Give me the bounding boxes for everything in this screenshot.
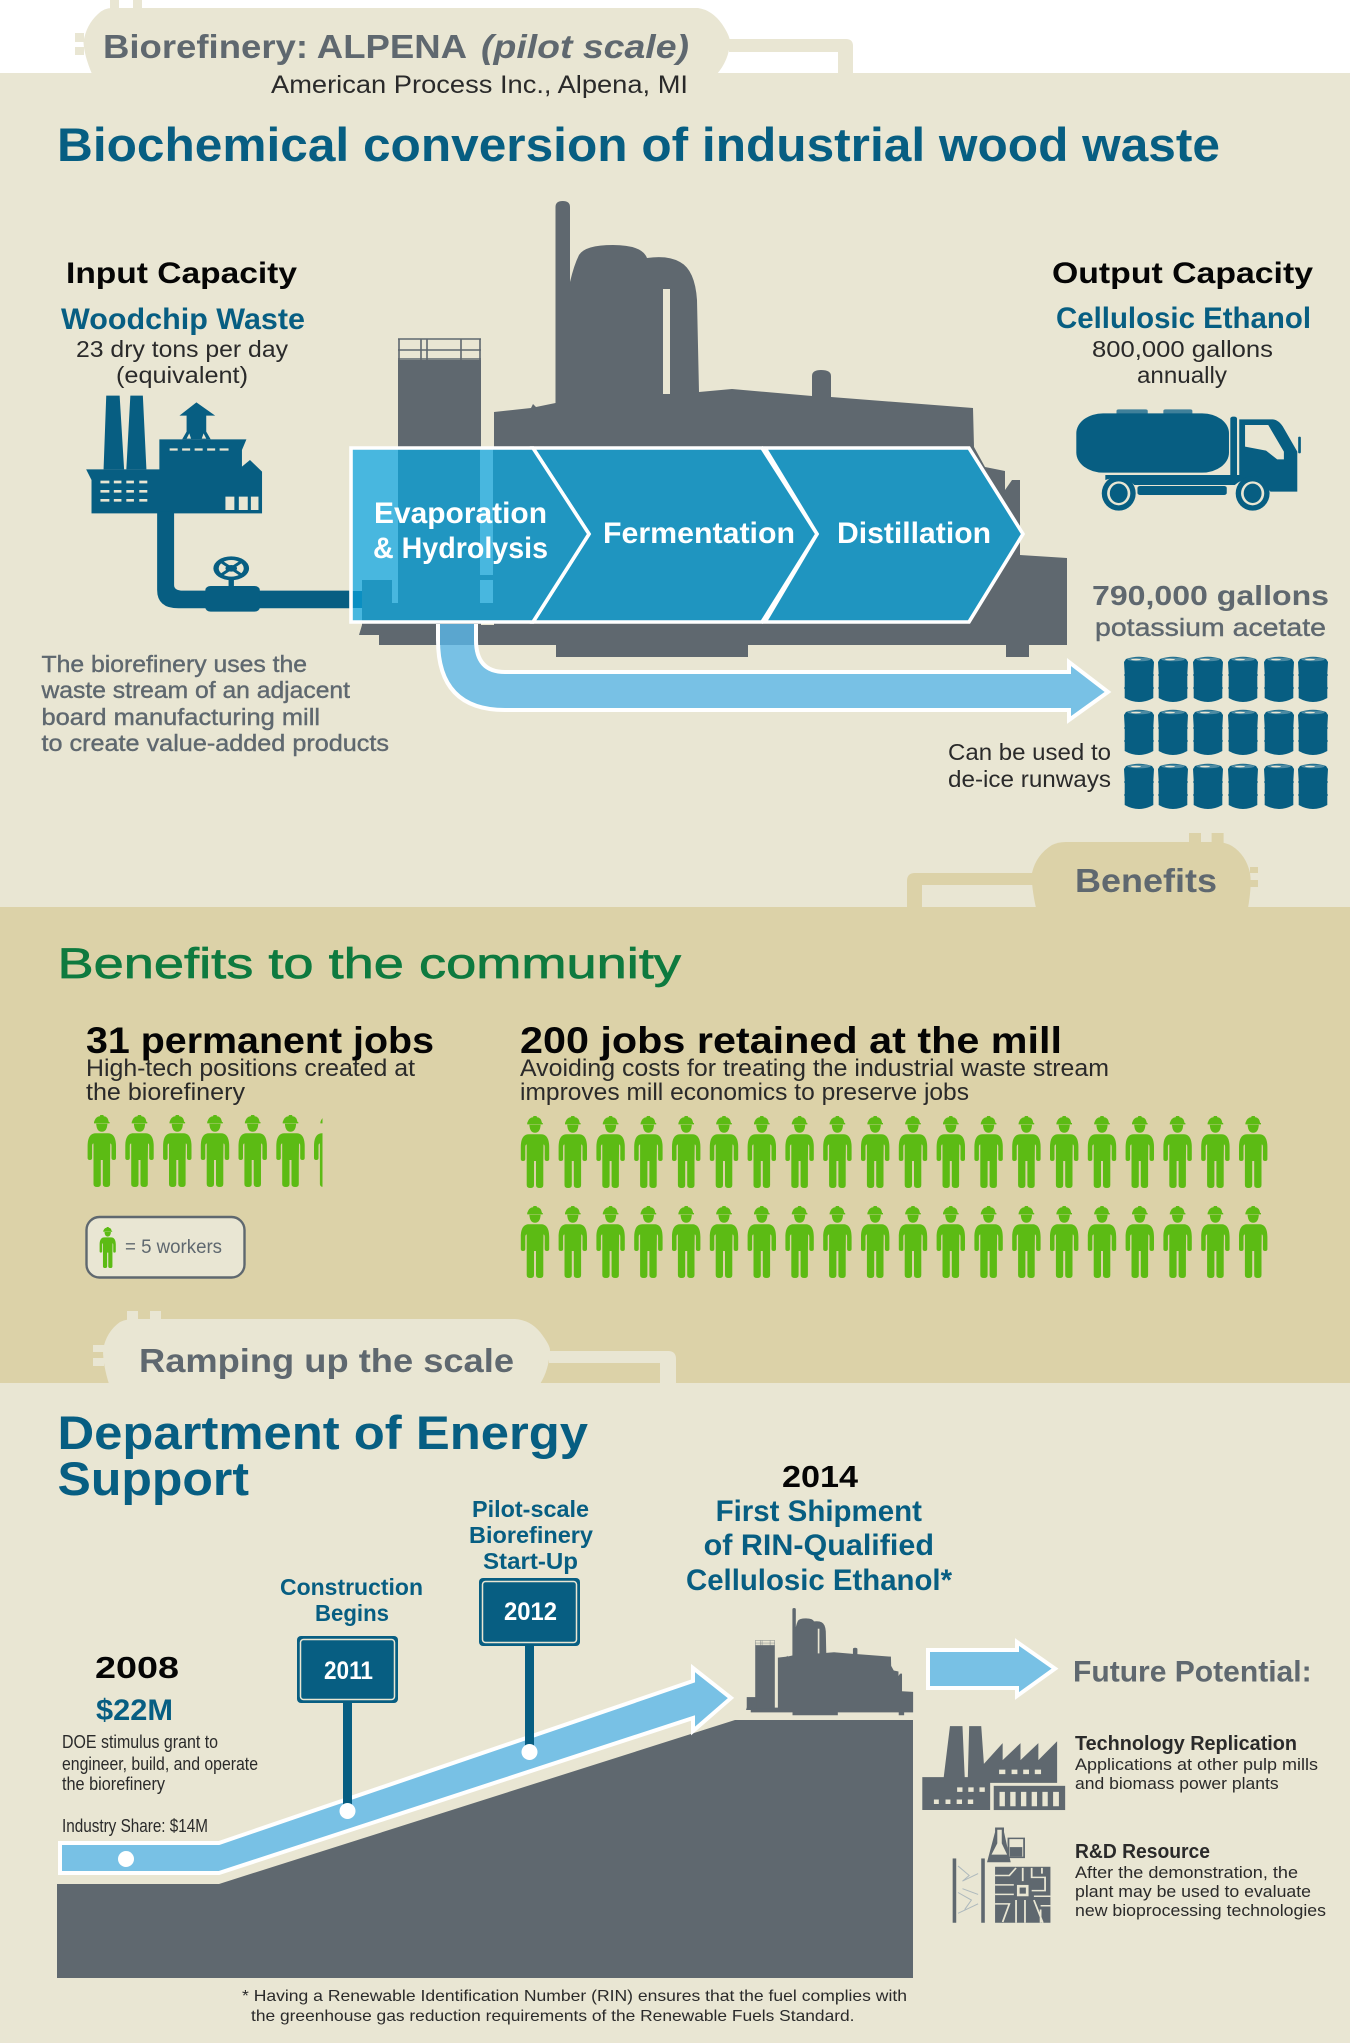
panel: output capacity text [1052,257,1313,388]
text block: 31 permanent jobs: High-tech positions created at [86,1055,415,1082]
header tank: biorefinery title [75,0,853,74]
timeline: 2008 grant: Industry Share: $14M [62,1816,208,1836]
timeline: 2011 construction begins [280,1574,423,1819]
icon: input factory with pipe and valve [86,396,353,612]
text: research resource: plant may be used to evaluate [1075,1882,1311,1901]
text block: 200 jobs retained [520,1020,1109,1106]
timeline: 2008 grant: engineer, build, and operate [62,1754,258,1774]
timeline: 2008 grant: DOE stimulus grant to [62,1732,218,1752]
heading: benefits to the community: Benefits to the community [58,940,682,988]
heading: department of energy support [58,1406,588,1505]
arrow: future potential [928,1642,1055,1696]
text: waste stream description [40,651,389,756]
heading: future potential: Future Potential: [1073,1656,1312,1688]
chevron: fermentation: Fermentation [603,517,795,550]
panel: output capacity text: Output Capacity [1052,257,1313,290]
timeline: 2014 first shipment [686,1459,952,1597]
tab: benefits tank [907,833,1258,908]
header tank: biorefinery title: (pilot scale) [481,28,689,65]
panel: input capacity text [61,257,305,388]
text: research resource: After the demonstration, the [1075,1863,1298,1882]
text: potassium acetate output [1092,580,1329,642]
timeline: 2014 first shipment: First Shipment [716,1495,922,1528]
text: research resource: R&D Resource [1075,1841,1210,1863]
timeline: 2008 grant: 2008 [95,1650,179,1685]
pictogram: 31 workers [88,1115,342,1187]
timeline: 2012 pilot-scale start-up: Pilot-scale [472,1496,589,1522]
text: research resource: new bioprocessing technologies [1075,1901,1326,1920]
timeline: 2008 grant: $22M [96,1694,173,1727]
text: waste stream description: board manufacturing mill [42,704,320,730]
timeline: 2012 pilot-scale start-up: Start-Up [483,1548,578,1574]
text: technology replication [1075,1733,1318,1793]
chevron: evaporation and hydrolysis: & Hydrolysis [373,532,548,565]
text: de-ice note [948,739,1111,792]
background: benefits section [0,907,1350,1383]
pictogram: 200 workers [521,1116,1267,1278]
text: technology replication: Technology Replication [1075,1733,1297,1755]
timeline: 2014 first shipment: of RIN-Qualified [704,1529,934,1562]
subtitle: location: American Process Inc., Alpena, MI [271,71,688,99]
heading: department of energy support: Department of Energy [58,1406,588,1459]
timeline: 2012 pilot-scale start-up: 2012 [504,1598,557,1626]
text block: 200 jobs retained: Avoiding costs for treating the industrial waste stream [520,1055,1109,1082]
heading: biochemical conversion: Biochemical conversion of industrial wood waste [57,118,1220,171]
timeline: 2014 first shipment: Cellulosic Ethanol* [686,1564,952,1597]
chevron: fermentation [533,448,817,622]
chevron: distillation [765,448,1023,622]
panel: output capacity text: annually [1137,362,1228,388]
panel: input capacity text: 23 dry tons per day [76,336,289,362]
footnote: * Having a Renewable Identification Number (RIN) ensures that the fuel complies with [242,1988,907,2005]
arrow: potassium acetate stream [438,624,1108,720]
panel: input capacity text: Woodchip Waste [61,303,305,336]
text block: 31 permanent jobs [86,1020,434,1106]
icon: barrels grid [1124,657,1328,809]
text: potassium acetate output: 790,000 gallons [1092,580,1329,611]
text: potassium acetate output: potassium acetate [1095,614,1326,642]
tab: ramping up the scale tank [93,1311,676,1384]
text block: 200 jobs retained: 200 jobs retained at the mill [520,1020,1062,1061]
background: top section [0,73,1350,907]
chevron: distillation: Distillation [837,517,991,550]
text: waste stream description: waste stream of an adjacent [40,677,351,703]
timeline: 2014 first shipment: 2014 [782,1459,859,1494]
timeline: 2008 grant [62,1650,258,1836]
panel: output capacity text: Cellulosic Ethanol [1056,302,1311,335]
icon: small plant silhouette [746,1608,913,1715]
text: waste stream description: to create value-added products [42,730,389,756]
footnote [242,1988,907,2025]
header tank: biorefinery title: Biorefinery: ALPENA [103,28,467,65]
timeline: 2012 pilot-scale start-up [469,1496,593,1760]
chart: gray hill [57,1720,913,1978]
text block: 31 permanent jobs: 31 permanent jobs [86,1020,434,1061]
icon: tanker truck [1076,409,1301,511]
timeline: 2011 construction begins: Construction [280,1574,423,1600]
text: research resource [1075,1841,1326,1920]
chevron: evaporation and hydrolysis: Evaporation [374,497,547,530]
text: waste stream description: The biorefinery uses the [42,651,307,677]
diagram: process chevrons [351,448,1023,622]
diagram: plant silhouette [359,201,1067,657]
background: ramping section [0,1383,1350,2043]
tab: ramping up the scale tank: Ramping up the scale [139,1342,514,1379]
arrow: timeline ramp [60,1668,731,1873]
tab: benefits tank: Benefits [1075,862,1217,899]
legend: 5 workers: = 5 workers [125,1237,222,1258]
heading: department of energy support: Support [58,1452,249,1505]
panel: output capacity text: 800,000 gallons [1092,336,1273,362]
panel: input capacity text: (equivalent) [116,362,248,388]
panel: input capacity text: Input Capacity [66,257,297,290]
timeline: 2012 pilot-scale start-up: Biorefinery [469,1522,593,1548]
text: de-ice note: de-ice runways [948,766,1111,792]
text block: 200 jobs retained: improves mill economics to preserve jobs [520,1079,969,1106]
footnote: the greenhouse gas reduction requirements of the Renewable Fuels Standard. [251,2008,854,2025]
timeline: 2011 construction begins: 2011 [324,1657,373,1685]
text: technology replication: Applications at other pulp mills [1075,1755,1318,1774]
icon: factories [922,1726,1065,1810]
chevron: evaporation and hydrolysis [351,448,589,622]
text: de-ice note: Can be used to [948,739,1111,765]
icon: research and circuit [953,1827,1050,1923]
text block: 31 permanent jobs: the biorefinery [86,1079,245,1106]
legend: 5 workers [86,1217,244,1278]
timeline: 2008 grant: the biorefinery [62,1774,165,1794]
timeline: 2011 construction begins: Begins [315,1600,389,1626]
text: technology replication: and biomass power plants [1075,1774,1279,1793]
